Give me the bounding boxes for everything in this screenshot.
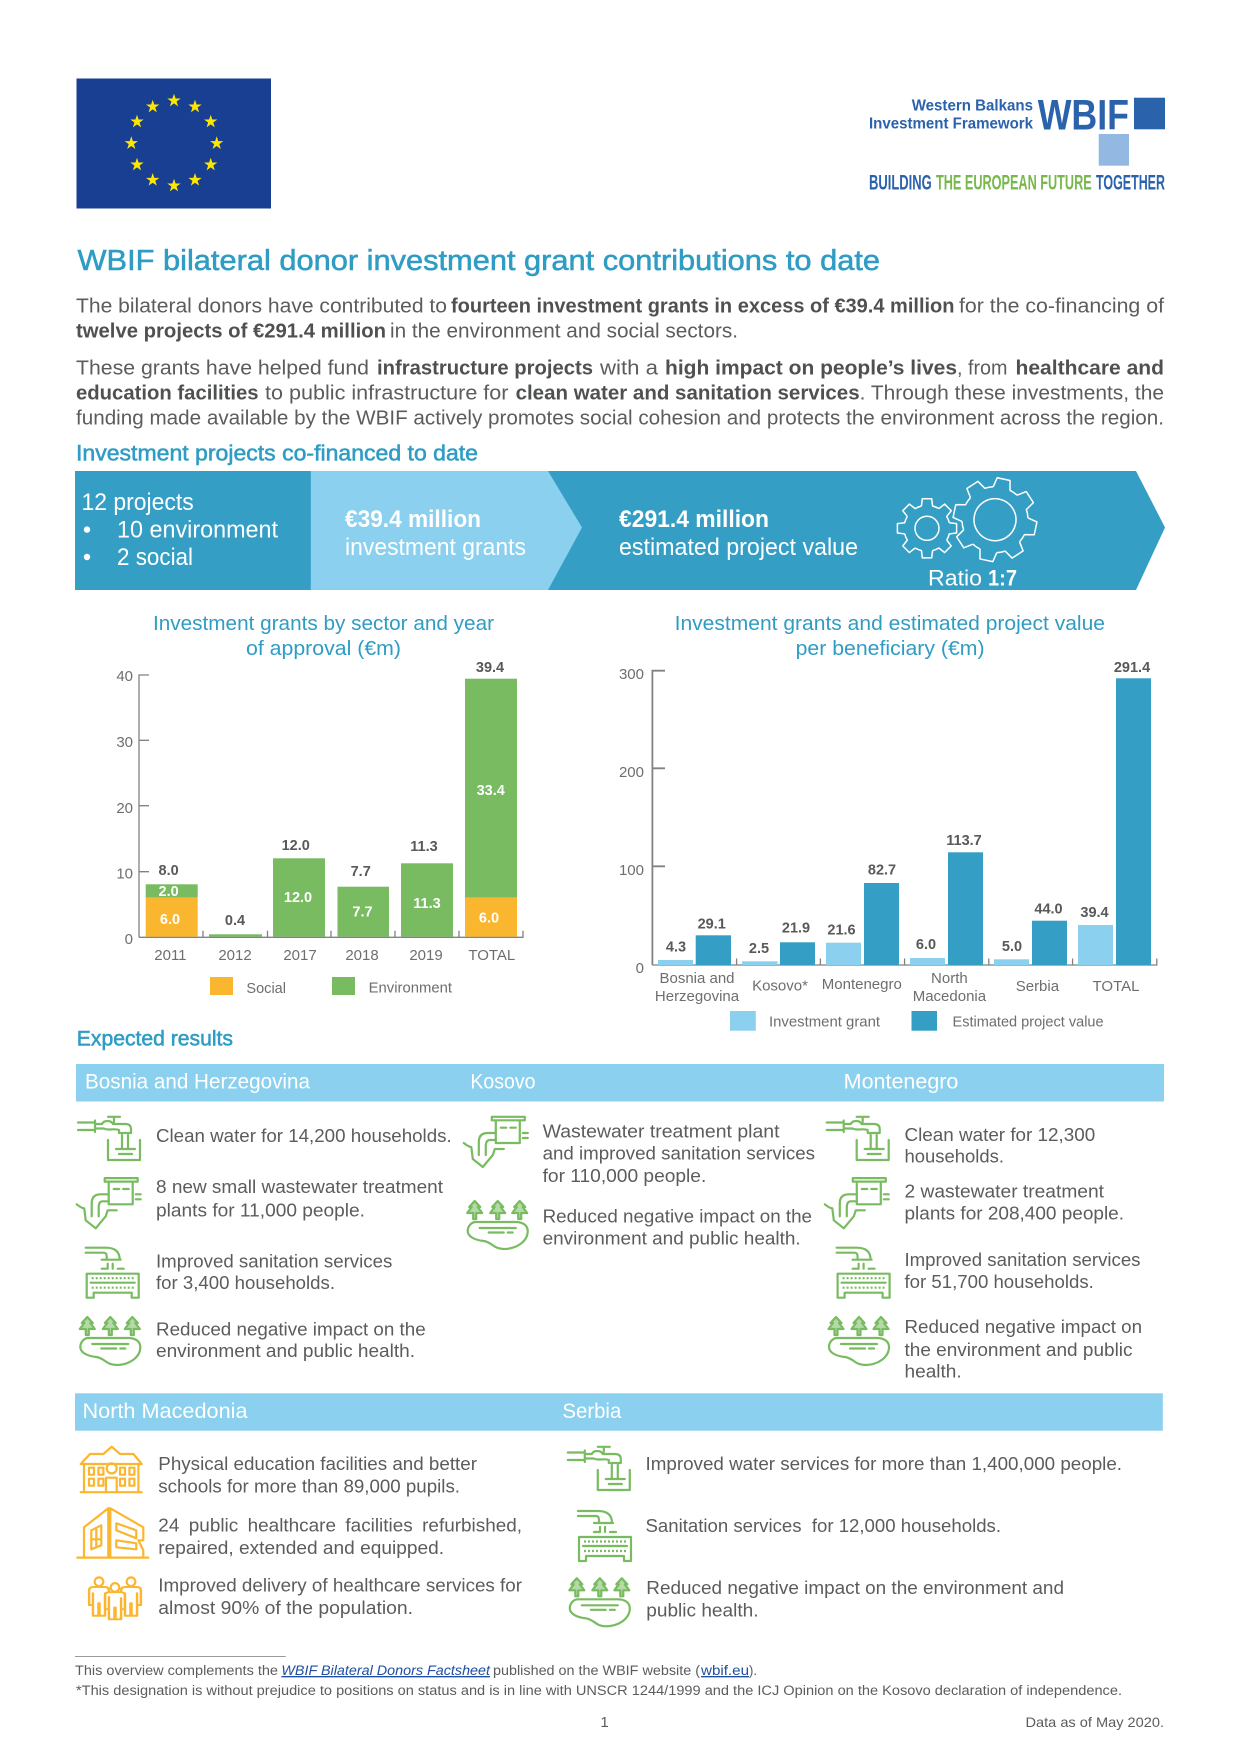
x axis labels (655, 970, 1139, 1005)
result: wastewater: 8 new small wastewater treatment (156, 1177, 443, 1197)
x axis labels: 2012 (218, 947, 252, 964)
result: water services: Improved water services for more than 1,400,000 people. (646, 1454, 1122, 1474)
result: wastewater: Wastewater treatment plant (543, 1121, 779, 1141)
y axis (619, 666, 1157, 977)
value labels: 0.4 (225, 913, 245, 929)
project value (619, 506, 858, 561)
result: sanitation: Improved sanitation services (156, 1251, 392, 1271)
bars (658, 678, 1151, 965)
text block: introduction: with a (599, 358, 659, 380)
result: sanitation (904, 1250, 1140, 1292)
footnotes: ). (749, 1663, 757, 1678)
result: clean water: Clean water for 14,200 households. (156, 1126, 452, 1146)
text block: introduction: education facilities (76, 382, 259, 404)
icon: gears (897, 470, 1044, 569)
panel: Serbia results (568, 1447, 1122, 1626)
chart title: of approval (€m) (246, 637, 401, 660)
grants value: €39.4 million (345, 506, 481, 533)
result: wastewater (904, 1181, 1124, 1223)
icon: sanitation (86, 1248, 139, 1298)
y axis: 200 (619, 764, 644, 781)
result: environment: health. (904, 1362, 962, 1382)
footnotes: published on the WBIF website ( (493, 1663, 701, 1678)
panel: Kosovo results (464, 1117, 815, 1249)
icon: wastewater plant (77, 1178, 141, 1228)
text block: introduction: , from (957, 358, 1008, 380)
footnote rule (75, 1655, 286, 1658)
panel: results header row 1: Kosovo (470, 1071, 536, 1094)
icon: lake and trees (828, 1317, 889, 1365)
text block: introduction: The bilateral donors have contributed to (76, 296, 447, 318)
result: environment (156, 1319, 426, 1361)
heading: expected results: Expected results (77, 1028, 233, 1051)
y axis: 0 (636, 960, 644, 977)
legend: Social (246, 981, 286, 997)
result: healthcare facilities: 24 public healthcare facilities refurbished, (158, 1516, 522, 1536)
footnotes: WBIF Bilateral Donors Factsheet (281, 1663, 491, 1678)
legend (730, 1011, 1104, 1031)
value labels: 7.7 (352, 905, 373, 921)
arrow: estimated project value (75, 471, 1165, 590)
result: sanitation (156, 1251, 392, 1293)
x axis labels: Herzegovina (655, 988, 740, 1005)
text block: introduction: for the co-financing of (959, 296, 1164, 318)
value labels: 12.0 (282, 838, 310, 854)
value labels: 6.0 (160, 912, 180, 928)
icon: hospital building (77, 1508, 148, 1558)
result: clean water: households. (904, 1147, 1004, 1167)
result: environment: environment and public health. (156, 1341, 415, 1361)
result: healthcare facilities (158, 1516, 522, 1558)
result: healthcare facilities: repaired, extended and equipped. (158, 1538, 444, 1558)
logo: WBIF: Investment Framework (869, 116, 1033, 133)
page number: 1 (600, 1714, 609, 1731)
result: clean water: Clean water for 12,300 (904, 1125, 1095, 1145)
value labels: 39.4 (476, 660, 504, 676)
panel: North Macedonia results (77, 1447, 522, 1619)
logo: WBIF: TOGETHER (1096, 171, 1165, 194)
heading: investment projects: Investment projects co-financed to date (76, 441, 478, 466)
result: environment (904, 1317, 1142, 1382)
result: healthcare services: Improved delivery of healthcare services for (158, 1576, 522, 1596)
text block: introduction: twelve projects of €291.4 million (76, 320, 386, 342)
text block: introduction: funding made available by the WBIF actively promotes social cohesion and protects the environment across the region. (76, 408, 1164, 430)
logo: WBIF (869, 91, 1165, 194)
chart title: Investment grants by sector and year (153, 612, 494, 635)
footnotes (75, 1663, 1122, 1698)
value labels: 44.0 (1034, 902, 1063, 918)
x axis labels: Bosnia and (659, 970, 735, 987)
bars (146, 679, 517, 937)
x axis labels: Serbia (1016, 978, 1060, 995)
result: healthcare services (158, 1576, 522, 1618)
value labels: 29.1 (698, 916, 726, 932)
value labels: 4.3 (666, 940, 686, 956)
footnotes: *This designation is without prejudice to positions on status and is in line with UNSCR 1244/1999 and the ICJ Opinion on the Kosovo declaration of independence. (76, 1683, 1122, 1698)
result: environment: environment and public health. (543, 1228, 801, 1248)
text block: introduction: . Through these investments, the (860, 382, 1164, 404)
text block: introduction: clean water and sanitation services (516, 382, 860, 404)
icon: school (81, 1447, 142, 1492)
title: WBIF bilateral donor investment grant contributions to date (78, 245, 880, 277)
value labels: 21.6 (827, 922, 856, 938)
chart title (675, 612, 1105, 660)
icon: water tap (78, 1117, 140, 1160)
legend (210, 977, 452, 997)
result: sanitation: for 3,400 households. (156, 1273, 335, 1293)
grants value: investment grants (345, 534, 526, 561)
result: healthcare services: almost 90% of the population. (158, 1598, 413, 1618)
chart title: Investment grants and estimated project value (675, 612, 1105, 635)
panel: summary banner (75, 470, 1165, 591)
logo: WBIF: BUILDING (869, 171, 932, 194)
result: wastewater (156, 1177, 443, 1220)
icon: water tap (827, 1117, 889, 1160)
icon: water tap (568, 1447, 630, 1490)
result: wastewater: and improved sanitation services (543, 1143, 815, 1163)
project value: estimated project value (619, 534, 858, 561)
value labels: 291.4 (1114, 660, 1150, 676)
footnotes: wbif.eu (700, 1663, 749, 1678)
result: sanitation: Sanitation services for 12,000 households. (646, 1516, 1001, 1536)
y axis: 30 (116, 734, 133, 751)
icon: wastewater plant (825, 1178, 889, 1228)
result: environment: the environment and public (904, 1340, 1132, 1360)
text block: introduction: in the environment and social sectors. (390, 320, 738, 342)
text block: introduction: to public infrastructure for (265, 382, 509, 404)
text block: introduction: healthcare and (1016, 358, 1164, 380)
value labels: 113.7 (946, 833, 982, 849)
icon: lake and trees (80, 1317, 140, 1365)
chart title (153, 612, 494, 660)
text block: introduction: These grants have helped fund (76, 358, 369, 380)
panel: results header row 2: Serbia (562, 1400, 622, 1423)
icon: people (89, 1577, 141, 1619)
panel: results header row 2 (75, 1393, 1163, 1431)
arrow: investment grants (311, 471, 582, 590)
result: environment: Reduced negative impact on the (156, 1319, 426, 1339)
projects count: 10 environment (117, 516, 278, 544)
value labels: 12.0 (284, 890, 312, 906)
legend: Estimated project value (952, 1015, 1104, 1031)
logo: WBIF: WBIF (1038, 91, 1129, 139)
panel: bar chart by sector and year (116, 612, 523, 997)
projects count: 2 social (117, 544, 193, 571)
panel: results header row 2: North Macedonia (82, 1400, 248, 1423)
result: sanitation: for 51,700 households. (904, 1272, 1094, 1292)
icon: sanitation (837, 1248, 890, 1298)
value labels: 39.4 (1080, 905, 1109, 921)
value labels (159, 660, 505, 929)
result: education: Physical education facilities and better (158, 1454, 477, 1474)
value labels (666, 660, 1150, 957)
result: environment (543, 1206, 812, 1248)
logo: WBIF: THE EUROPEAN FUTURE (936, 171, 1092, 194)
x axis labels: Macedonia (913, 988, 987, 1005)
icon: sanitation (578, 1511, 631, 1561)
value labels: 33.4 (477, 783, 505, 799)
icon: wastewater plant (464, 1117, 528, 1167)
value labels: 82.7 (868, 862, 896, 878)
icon: lake and trees (467, 1201, 528, 1249)
x axis labels: 2019 (409, 947, 443, 964)
logo: WBIF: Western Balkans (912, 98, 1033, 115)
x axis labels: North (931, 970, 968, 987)
result: wastewater: plants for 208,400 people. (904, 1203, 1124, 1223)
result: wastewater: for 110,000 people. (543, 1166, 706, 1186)
panel: results header row 1: Bosnia and Herzegovina (85, 1071, 310, 1094)
text block: introduction: high impact on people’s lives (665, 358, 957, 380)
result: environment (646, 1578, 1064, 1621)
panel: bar chart per beneficiary (619, 612, 1157, 1031)
icon: lake and trees (569, 1578, 630, 1626)
grants value (345, 506, 526, 561)
x axis labels: TOTAL (468, 947, 515, 964)
x axis labels: 2011 (154, 947, 187, 964)
projects count: 12 projects (82, 489, 194, 516)
legend: Investment grant (769, 1015, 880, 1031)
value labels: 11.3 (413, 896, 441, 912)
legend: Environment (369, 981, 452, 997)
panel: Bosnia and Herzegovina results (77, 1117, 452, 1365)
result: environment: Reduced negative impact on the environment and (646, 1578, 1064, 1598)
x axis labels (154, 947, 515, 964)
chart title: per beneficiary (€m) (796, 637, 985, 660)
value labels: 5.0 (1002, 939, 1022, 955)
footnotes: This overview complements the (75, 1663, 278, 1678)
y axis (116, 668, 523, 948)
value labels: 6.0 (916, 937, 936, 953)
result: education: schools for more than 89,000 pupils. (158, 1477, 460, 1497)
y axis: 40 (116, 668, 133, 685)
result: wastewater (543, 1121, 815, 1186)
y axis: 20 (116, 800, 133, 817)
panel: results header row 1 (76, 1064, 1164, 1102)
ratio (928, 566, 1017, 591)
value labels: 2.5 (749, 941, 769, 957)
result: wastewater: plants for 11,000 people. (156, 1200, 365, 1220)
x axis labels: TOTAL (1093, 978, 1139, 995)
text block: introduction (76, 296, 1164, 430)
panel: results header row 1: Montenegro (844, 1071, 958, 1094)
text block: introduction: infrastructure projects (377, 358, 593, 380)
y axis: 300 (619, 666, 644, 683)
result: clean water (904, 1125, 1095, 1167)
value labels: 8.0 (159, 863, 179, 879)
x axis labels: 2018 (345, 947, 379, 964)
result: sanitation: Improved sanitation services (904, 1250, 1140, 1270)
result: environment: Reduced negative impact on (904, 1317, 1142, 1337)
value labels: 2.0 (159, 884, 179, 900)
ratio: Ratio (928, 566, 982, 591)
result: environment: public health. (646, 1601, 758, 1621)
value labels: 6.0 (479, 911, 499, 927)
data date: Data as of May 2020. (1026, 1714, 1164, 1730)
value labels: 7.7 (351, 864, 371, 880)
ratio: 1:7 (988, 566, 1017, 591)
y axis: 10 (116, 866, 133, 883)
panel: Montenegro results (825, 1117, 1142, 1382)
result: wastewater: 2 wastewater treatment (904, 1181, 1104, 1201)
text block: introduction: fourteen investment grants in excess of €39.4 million (451, 296, 954, 318)
value labels: 21.9 (782, 920, 810, 936)
value labels: 11.3 (410, 839, 438, 855)
x axis labels: Montenegro (822, 976, 902, 993)
x axis labels: Kosovo* (752, 978, 808, 995)
project value: €291.4 million (619, 506, 769, 533)
y axis: 100 (619, 862, 644, 879)
y axis: 0 (125, 931, 133, 948)
x axis labels: 2017 (283, 947, 317, 964)
projects count (82, 489, 278, 571)
result: environment: Reduced negative impact on the (543, 1206, 812, 1226)
icon: EU flag (76, 78, 271, 208)
result: education (158, 1454, 477, 1497)
